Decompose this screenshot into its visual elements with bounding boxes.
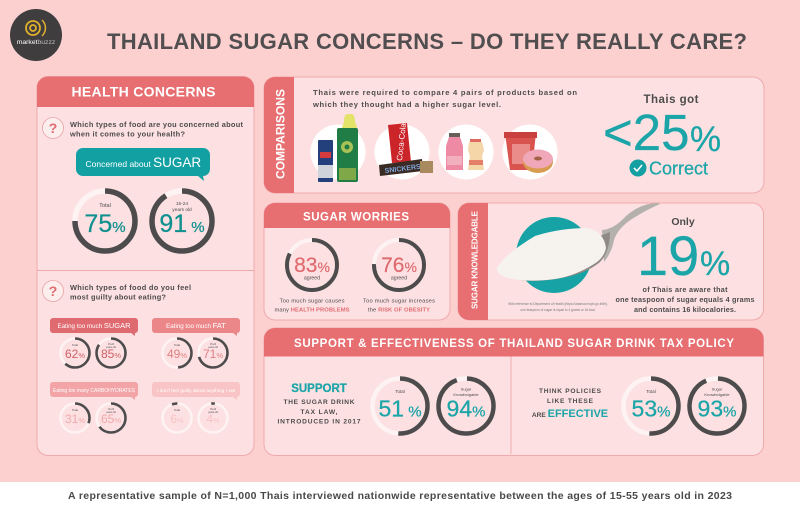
- support text: [278, 383, 361, 426]
- support header: [264, 328, 764, 356]
- product: cola and chocolate bar: [374, 122, 433, 180]
- callout: no guilt: I don't feel guilty about anything I eat: [157, 388, 236, 394]
- donut: total 75%: [75, 191, 135, 251]
- donut: 76% agreed: agreed: [391, 276, 407, 282]
- panel: comparisons: which they thought had a higher sugar level.: [312, 100, 501, 109]
- donut: fat 71%: 71%: [203, 347, 223, 361]
- donut: fat 71%: 15-24: [210, 343, 217, 346]
- stat: only 19%: and contains 16 kilocalories.: [634, 305, 736, 314]
- donut: support total 51%: [372, 378, 428, 434]
- donut: fat 71%: years old: [208, 346, 219, 349]
- sugar knowledgable tab: [458, 203, 488, 320]
- worry caption: health problems: Too much sugar causes: [280, 298, 345, 304]
- callout: concerned about sugar: Concerned about SUGAR: [86, 155, 201, 170]
- callout: no guilt: [152, 382, 240, 400]
- sugar worries header: SUGAR WORRIES: [303, 212, 409, 224]
- product: pink milk and yoghurt drink: [438, 124, 494, 180]
- donut: 15-24 91%: years old: [172, 207, 192, 213]
- stat: only 19%: one teaspoon of sugar equals 4 grams: [616, 295, 754, 304]
- health concerns header: [37, 76, 254, 107]
- support text: SUPPORT: [291, 383, 347, 395]
- donut: 83% agreed: agreed: [304, 276, 320, 282]
- stat: only 19%: [616, 216, 754, 314]
- support header: SUPPORT & EFFECTIVENESS OF THAILAND SUGAR DRINK TAX POLICY: [294, 338, 734, 350]
- icon: question mark: [42, 118, 64, 138]
- donut: effective total 53%: Total: [646, 389, 656, 394]
- donut: carbohydrates total 31%: [60, 404, 90, 432]
- stat: only 19%: 19: [637, 224, 699, 287]
- product: cola and chocolate bar: SNICKERS: [384, 164, 421, 175]
- donut: carbohydrates total 31%: Total: [72, 408, 78, 412]
- callout: carbohydrates: Eating too many CARBOHYDRATES: [53, 388, 136, 394]
- donut: fat 71%: [198, 338, 228, 368]
- donut: no guilt 4%: 4%: [206, 412, 220, 426]
- stat: under 25% correct: Correct: [649, 158, 708, 178]
- sugar knowledgable tab: SUGAR KNOWLEDGABLE: [470, 210, 480, 309]
- panel: sugar worries: [264, 203, 450, 320]
- donut: effective knowledgeable 93%: Sugar: [712, 386, 723, 392]
- donut: sugar 15-24 85%: 15-24: [108, 343, 115, 346]
- donut: 15-24 91%: 15-24: [176, 201, 188, 207]
- donut: effective knowledgeable 93%: [689, 378, 745, 434]
- donut: fat total 49%: Total: [174, 343, 180, 347]
- icon: check: [630, 160, 646, 176]
- effective text: THINK POLICIES: [539, 388, 602, 395]
- worry caption: risk of obesity: the RISK OF OBESITY: [368, 308, 430, 314]
- donut: sugar total 62%: Total: [72, 343, 78, 347]
- panel: health concerns: most guilty about eating?: [70, 292, 166, 302]
- donut: carbohydrates 65%: 65%: [101, 412, 121, 426]
- callout: sugar: [50, 318, 138, 336]
- icon: question mark: ?: [49, 283, 57, 299]
- footer band: [0, 482, 800, 511]
- worry caption: risk of obesity: Too much sugar increases: [363, 298, 435, 304]
- donut: fat total 49%: [162, 338, 192, 368]
- donut: sugar 15-24 85%: years old: [106, 346, 117, 349]
- product: ice cream and doughnut: [502, 124, 558, 180]
- footnote: [508, 302, 608, 312]
- donut: support knowledgeable 94%: [438, 378, 494, 434]
- callout: carbohydrates: [50, 382, 138, 400]
- donut: effective knowledgeable 93%: 93%: [698, 396, 736, 422]
- donut: 76% agreed: 76%: [381, 254, 417, 277]
- donut: effective total 53%: [624, 378, 678, 434]
- footnote: one teaspoon of sugar is equal to 4 grams or 16 kcal.: [520, 308, 596, 312]
- stat: only 19%: of Thais are aware that: [642, 285, 728, 294]
- logo: marketbuzzz: [10, 9, 62, 61]
- product: energy drink and tea: [310, 114, 366, 182]
- donut: total 75%: 75%: [84, 210, 126, 238]
- panel: comparisons: [264, 77, 764, 193]
- stat: under 25% correct: <25: [603, 104, 690, 161]
- donut: total 75%: Total: [99, 203, 111, 209]
- donut: sugar total 62%: [60, 338, 90, 368]
- panel: support and effectiveness: [264, 328, 764, 456]
- panel: sugar knowledgable: [458, 203, 764, 320]
- donut: carbohydrates 65%: 15-24: [108, 408, 115, 411]
- sugar worries header: [264, 203, 450, 228]
- product: cola and chocolate bar: Coca-Cola: [395, 122, 408, 161]
- stat: only 19%: Only: [671, 216, 695, 228]
- logo: marketbuzzz: marketbuzzz: [17, 39, 56, 46]
- donut: sugar 15-24 85%: [96, 338, 126, 368]
- donut: carbohydrates 65%: years old: [106, 411, 117, 414]
- comparisons tab: [264, 77, 294, 193]
- donut: support knowledgeable 94%: Sugar: [461, 386, 472, 392]
- callout: fat: Eating too much FAT: [166, 321, 226, 330]
- donut: no guilt 4%: [197, 402, 229, 434]
- donut: sugar 15-24 85%: 85%: [101, 347, 121, 361]
- donut: 83% agreed: [287, 240, 337, 290]
- donut: carbohydrates 65%: [96, 404, 126, 432]
- support text: THE SUGAR DRINK: [284, 399, 355, 406]
- donut: no guilt 4%: years old: [208, 411, 219, 414]
- comparisons intro text: Thais were required to compare 4 pairs of products based on: [313, 88, 577, 97]
- donut: carbohydrates total 31%: 31%: [65, 412, 85, 426]
- donut: support knowledgeable 94%: Knowledgable: [453, 392, 479, 397]
- donut: support total 51%: 51 %: [378, 396, 422, 422]
- donut: no guilt 4%: 15-24: [210, 408, 217, 411]
- title: THAILAND SUGAR CONCERNS – DO THEY REALLY CARE?: [107, 29, 747, 54]
- health concerns header: HEALTH CONCERNS: [72, 84, 216, 100]
- footnote: With reference to Department of Health (https://anamai.moph.go.th/th),: [508, 302, 608, 306]
- comparisons tab: COMPARISONS: [274, 89, 288, 179]
- panel: health concerns: when it comes to your health?: [69, 130, 185, 138]
- donut: effective knowledgeable 93%: Knowledgable: [704, 392, 730, 397]
- callout: fat: [152, 318, 240, 336]
- donut: fat total 49%: 49%: [167, 347, 187, 361]
- question one: Which types of food are you concerned about: [70, 120, 244, 129]
- question two: Which types of food do you feel: [70, 283, 191, 292]
- stat: under 25% correct: Thais got: [644, 94, 699, 106]
- effective text: ARE EFFECTIVE: [532, 408, 608, 420]
- donut: 83% agreed: 83%: [294, 254, 330, 277]
- donut: support knowledgeable 94%: 94%: [447, 396, 485, 422]
- donut: support total 51%: Total: [395, 389, 405, 394]
- donut: no guilt total 6%: Total: [174, 408, 180, 412]
- effective text: LIKE THESE: [547, 398, 594, 405]
- donut: effective total 53%: 53%: [632, 396, 670, 422]
- donut: 76% agreed: [374, 240, 424, 290]
- worry caption: health problems: many HEALTH PROBLEMS: [274, 308, 350, 314]
- donut: sugar total 62%: 62%: [65, 347, 85, 361]
- donut: no guilt total 6%: 6%: [170, 412, 184, 426]
- stat: under 25% correct: [603, 94, 721, 178]
- donut: 15-24 91%: [152, 191, 212, 251]
- callout: sugar: Eating too much SUGAR: [57, 321, 131, 330]
- donut: 15-24 91%: 91 %: [159, 210, 205, 238]
- callout: concerned about sugar: [76, 148, 210, 181]
- stat: under 25% correct: %: [690, 120, 721, 159]
- support text: TAX LAW,: [300, 409, 338, 416]
- panel: health concerns: [37, 76, 254, 456]
- support text: INTRODUCED IN 2017: [278, 418, 361, 426]
- icon: question mark: [42, 280, 64, 302]
- effective text: [532, 388, 608, 420]
- donut: no guilt total 6%: [158, 399, 196, 437]
- stat: only 19%: %: [700, 245, 730, 283]
- icon: question mark: ?: [49, 120, 57, 136]
- illustration: teaspoon of sugar: [497, 203, 660, 293]
- footer band: A representative sample of N=1,000 Thais interviewed nationwide representative between the ages of 15-55 years old in 2023: [68, 490, 732, 502]
